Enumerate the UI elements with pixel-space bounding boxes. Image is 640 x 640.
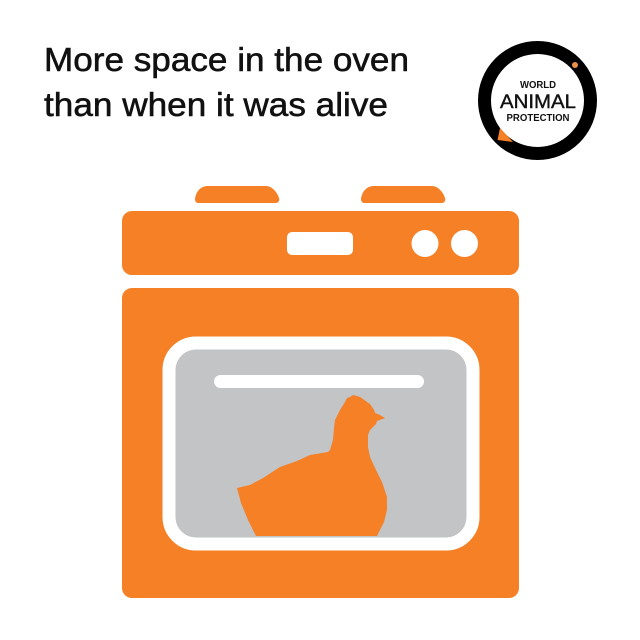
logo text	[500, 80, 576, 124]
display	[287, 232, 353, 255]
oven: left hob knob	[195, 186, 279, 203]
logo: World Animal Protection	[484, 48, 590, 154]
chicken silhouette	[237, 395, 387, 536]
right dial	[451, 230, 478, 257]
icon: orange wedge on ring	[498, 128, 513, 142]
logo text: PROTECTION	[506, 113, 570, 124]
title: than when it was alive	[44, 86, 388, 123]
logo text: ANIMAL	[500, 91, 576, 113]
oven rack	[214, 375, 424, 388]
oven: right hob knob	[361, 186, 445, 203]
title: More space in the oven	[44, 41, 409, 78]
oven window	[169, 343, 473, 544]
logo text: WORLD	[520, 80, 556, 91]
title	[44, 41, 409, 123]
oven: control panel	[122, 211, 519, 275]
oven: body	[122, 288, 519, 598]
left dial	[412, 230, 438, 257]
icon: orange dot on ring	[572, 62, 578, 68]
